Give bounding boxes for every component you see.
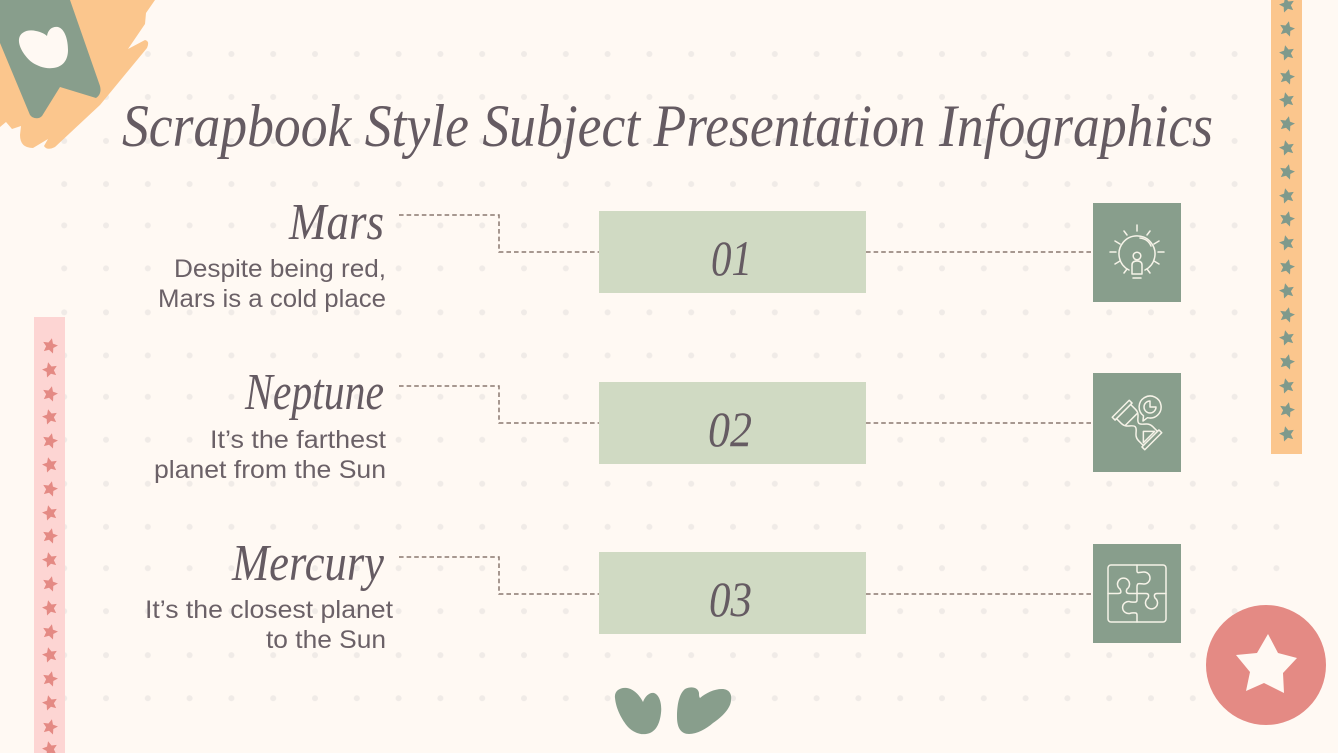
number box 02: [599, 382, 866, 464]
description: Mercury: [145, 596, 393, 654]
connector: number to icon: [866, 422, 1093, 424]
description: Mercury: to the Sun: [266, 626, 386, 654]
description: Mars: Despite being red,: [174, 255, 386, 283]
description: Neptune: [154, 426, 386, 484]
description: Neptune: It’s the farthest: [210, 426, 386, 454]
heading: Neptune: Neptune: [244, 364, 384, 421]
heading: Mercury: Mercury: [231, 535, 385, 592]
icon: light bulb with person: [1093, 203, 1181, 302]
heading: Mars: Mars: [288, 194, 384, 251]
description: Mars: [158, 255, 386, 313]
connector: label to number: [399, 557, 599, 594]
number box 03: 03: [709, 571, 752, 627]
green hearts: [615, 687, 731, 734]
row 3: Mercury: [145, 535, 1181, 654]
title: Scrapbook Style Subject Presentation Infographics: [122, 93, 1213, 159]
row 1: Mars: [158, 194, 1181, 313]
right orange star tape: [1271, 0, 1302, 454]
connector: label to number: [399, 215, 599, 252]
icon: puzzle: [1093, 544, 1181, 643]
description: Mars: Mars is a cold place: [158, 285, 386, 313]
connector: number to icon: [866, 593, 1093, 595]
icon: hourglass with clock: [1093, 373, 1181, 472]
icon: white heart: [19, 27, 68, 68]
number box 01: 01: [711, 230, 752, 286]
brush stroke with bookmark: [0, 0, 155, 149]
description: Neptune: planet from the Sun: [154, 456, 386, 484]
green bookmark: [0, 0, 100, 118]
orange brush stroke: [0, 0, 155, 149]
number box 02: 02: [708, 401, 752, 457]
connector: number to icon: [866, 251, 1093, 253]
left pink star tape: [34, 317, 65, 753]
connector: label to number: [399, 386, 599, 423]
description: Mercury: It’s the closest planet: [145, 596, 393, 624]
number box 01: [599, 211, 866, 293]
dot grid pattern: [58, 50, 1282, 705]
row 2: Neptune: [154, 364, 1181, 484]
pink star badge: [1206, 605, 1326, 725]
number box 03: [599, 552, 866, 634]
